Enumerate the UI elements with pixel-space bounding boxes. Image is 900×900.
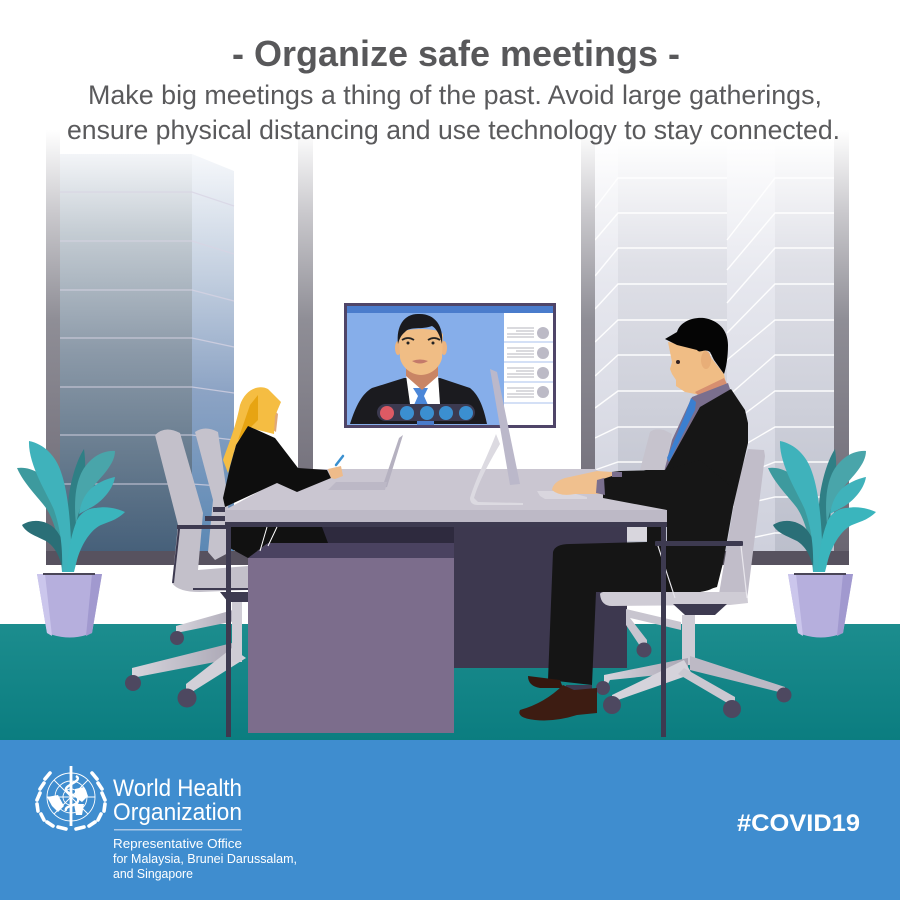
woman legs under desk	[228, 527, 328, 558]
title: - Organize safe meetings -	[232, 33, 680, 74]
left plant	[17, 441, 125, 638]
left building	[60, 154, 234, 552]
cabinet	[248, 543, 454, 733]
backrest and seat	[718, 449, 765, 600]
subtitle	[67, 80, 840, 145]
desktop monitor	[470, 369, 523, 505]
right building	[595, 140, 834, 552]
man on screen	[350, 314, 487, 424]
call controls	[377, 404, 475, 425]
jacket	[620, 389, 748, 592]
left chair armrests	[172, 507, 227, 583]
rear right chair	[627, 429, 672, 541]
desk top	[225, 469, 667, 527]
subtitle: ensure physical distancing and use technology to stay connected.	[67, 115, 840, 145]
woman in headscarf	[223, 387, 343, 507]
laptop	[328, 435, 403, 490]
keyboard	[537, 491, 587, 499]
back chair	[195, 428, 230, 560]
shoes	[519, 676, 597, 720]
WHO emblem	[37, 766, 105, 829]
window with city view	[46, 130, 849, 565]
WHO wordmark: Representative Office	[113, 837, 242, 851]
chair base	[125, 602, 246, 708]
WHO wordmark: and Singapore	[113, 867, 193, 881]
desk legs	[226, 522, 666, 737]
WHO wordmark: Organization	[113, 799, 242, 826]
WHO wordmark: World Health	[113, 775, 242, 802]
footer band	[0, 740, 900, 900]
hashtag: #COVID19	[737, 810, 860, 837]
collar and tie	[664, 383, 731, 472]
desk underside	[228, 522, 627, 668]
window frame columns	[46, 130, 849, 565]
subtitle: Make big meetings a thing of the past. Avoid large gatherings,	[88, 80, 822, 110]
front chair	[155, 429, 248, 592]
right plant	[768, 441, 876, 638]
WHO wordmark: for Malaysia, Brunei Darussalam,	[113, 852, 297, 866]
right chair armrest	[655, 541, 747, 598]
man upper body	[552, 318, 748, 592]
right chair	[596, 449, 792, 718]
wall screen with video call	[346, 304, 554, 426]
hands	[552, 471, 622, 495]
chair base	[596, 609, 792, 718]
floor	[0, 624, 900, 740]
WHO wordmark	[113, 775, 297, 881]
left chairs	[125, 428, 248, 708]
face and hair	[665, 318, 728, 397]
sleeve	[603, 460, 735, 510]
chat panel	[504, 313, 553, 425]
man legs	[519, 523, 717, 720]
